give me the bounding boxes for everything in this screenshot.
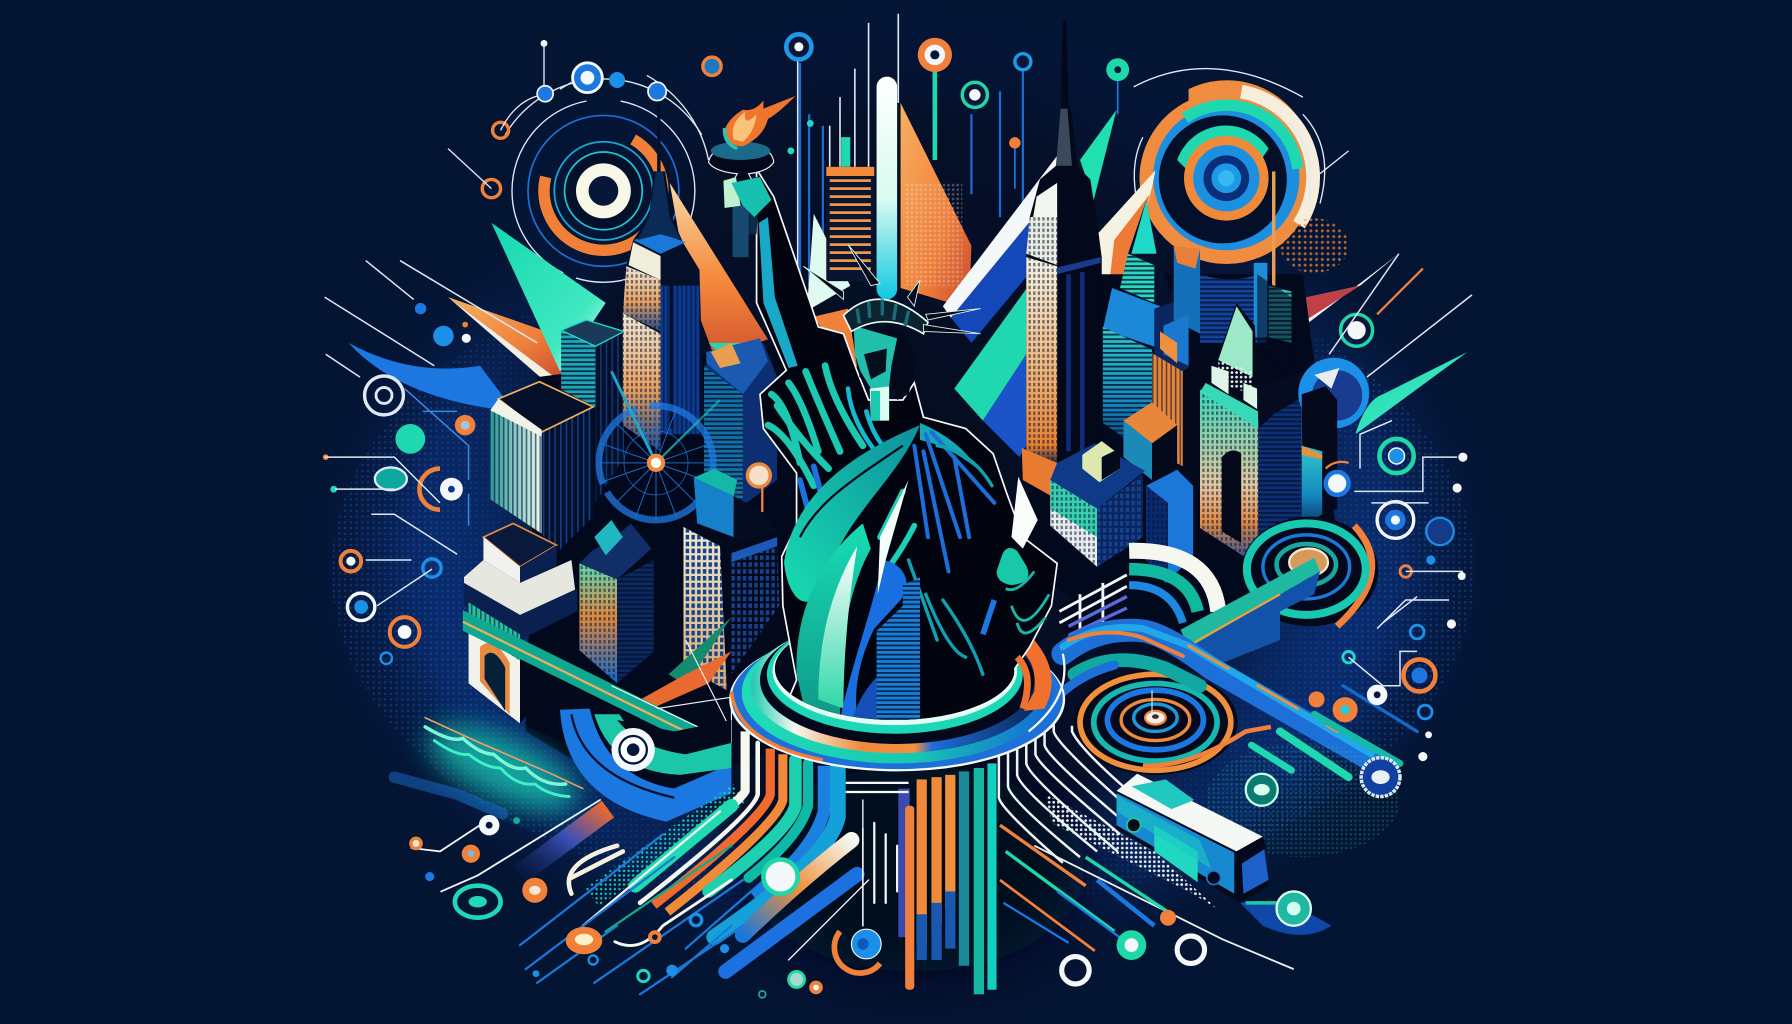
far left building <box>490 382 593 553</box>
road curves from ring <box>1057 627 1417 777</box>
top center nodes <box>786 34 1129 189</box>
left blue curved ramp <box>560 709 731 822</box>
central white bar and striped tower <box>826 77 897 299</box>
lower right building <box>1022 441 1193 583</box>
statue head and crown <box>803 245 981 421</box>
blue glass behind <box>1200 171 1291 343</box>
statue <box>757 169 1057 731</box>
stripes descending left <box>411 731 897 994</box>
white halftone road <box>1046 794 1217 909</box>
sharp triangle rays <box>349 103 1467 457</box>
left hand and sleeve <box>983 548 1049 634</box>
upper drapery folds <box>768 366 891 514</box>
building behind statue arm <box>704 338 777 514</box>
suspension bridge <box>463 610 731 789</box>
arm highlight <box>759 217 798 368</box>
right concentric road disc <box>1241 517 1378 626</box>
top left node arc <box>448 40 721 198</box>
white fold flash <box>878 480 909 594</box>
river waves <box>394 708 588 828</box>
centre folds <box>920 423 977 469</box>
bus <box>1117 774 1269 903</box>
small orange-top block <box>1123 402 1177 503</box>
arch bridge gate <box>464 523 577 723</box>
central building in robe <box>877 577 920 722</box>
ring front orange accent <box>1017 654 1064 731</box>
vertical stripes center <box>846 763 997 994</box>
tablet <box>1011 477 1038 549</box>
white parallel lines to bus <box>999 709 1126 863</box>
right lower circuit lines <box>1000 825 1331 969</box>
dark city mass <box>526 274 1337 971</box>
torch <box>709 96 795 257</box>
orange stripe building <box>1152 314 1211 503</box>
right circuit nodes <box>1326 254 1472 719</box>
statue silhouette <box>757 169 1057 731</box>
orange pin <box>747 464 770 512</box>
lower left nodes <box>409 815 881 998</box>
teal tower <box>561 320 624 503</box>
sash <box>784 425 920 602</box>
diagonal road to disc <box>1181 558 1320 663</box>
lower right nodes <box>1062 691 1432 984</box>
right tall teal building <box>1200 274 1302 571</box>
left Empire State tower <box>623 103 704 451</box>
background glow <box>286 137 1520 983</box>
teal halftone under road <box>1206 743 1400 857</box>
tan windowed building <box>683 469 783 690</box>
right slim building and blue sphere <box>1298 358 1369 528</box>
left circuit nodes <box>323 261 537 664</box>
right Empire State tower <box>1026 21 1102 463</box>
right radial target <box>1126 69 1349 278</box>
teal robe panel <box>796 523 871 714</box>
wheel radial <box>599 371 720 520</box>
left radial target <box>505 75 709 282</box>
orange shadow behind neck <box>814 309 857 367</box>
white robe highlight <box>818 546 857 709</box>
orange speckled tower <box>579 520 731 709</box>
thin top lines <box>798 14 1023 286</box>
ring base back layers <box>729 615 1065 771</box>
lower concentric disc <box>1073 670 1271 775</box>
white arc band <box>1129 551 1218 623</box>
blue lower fold <box>840 560 907 720</box>
right mid tower <box>1103 200 1200 457</box>
halftone dot field <box>331 229 1474 914</box>
striped block near ring <box>1059 571 1127 646</box>
dark central field <box>423 0 1383 983</box>
